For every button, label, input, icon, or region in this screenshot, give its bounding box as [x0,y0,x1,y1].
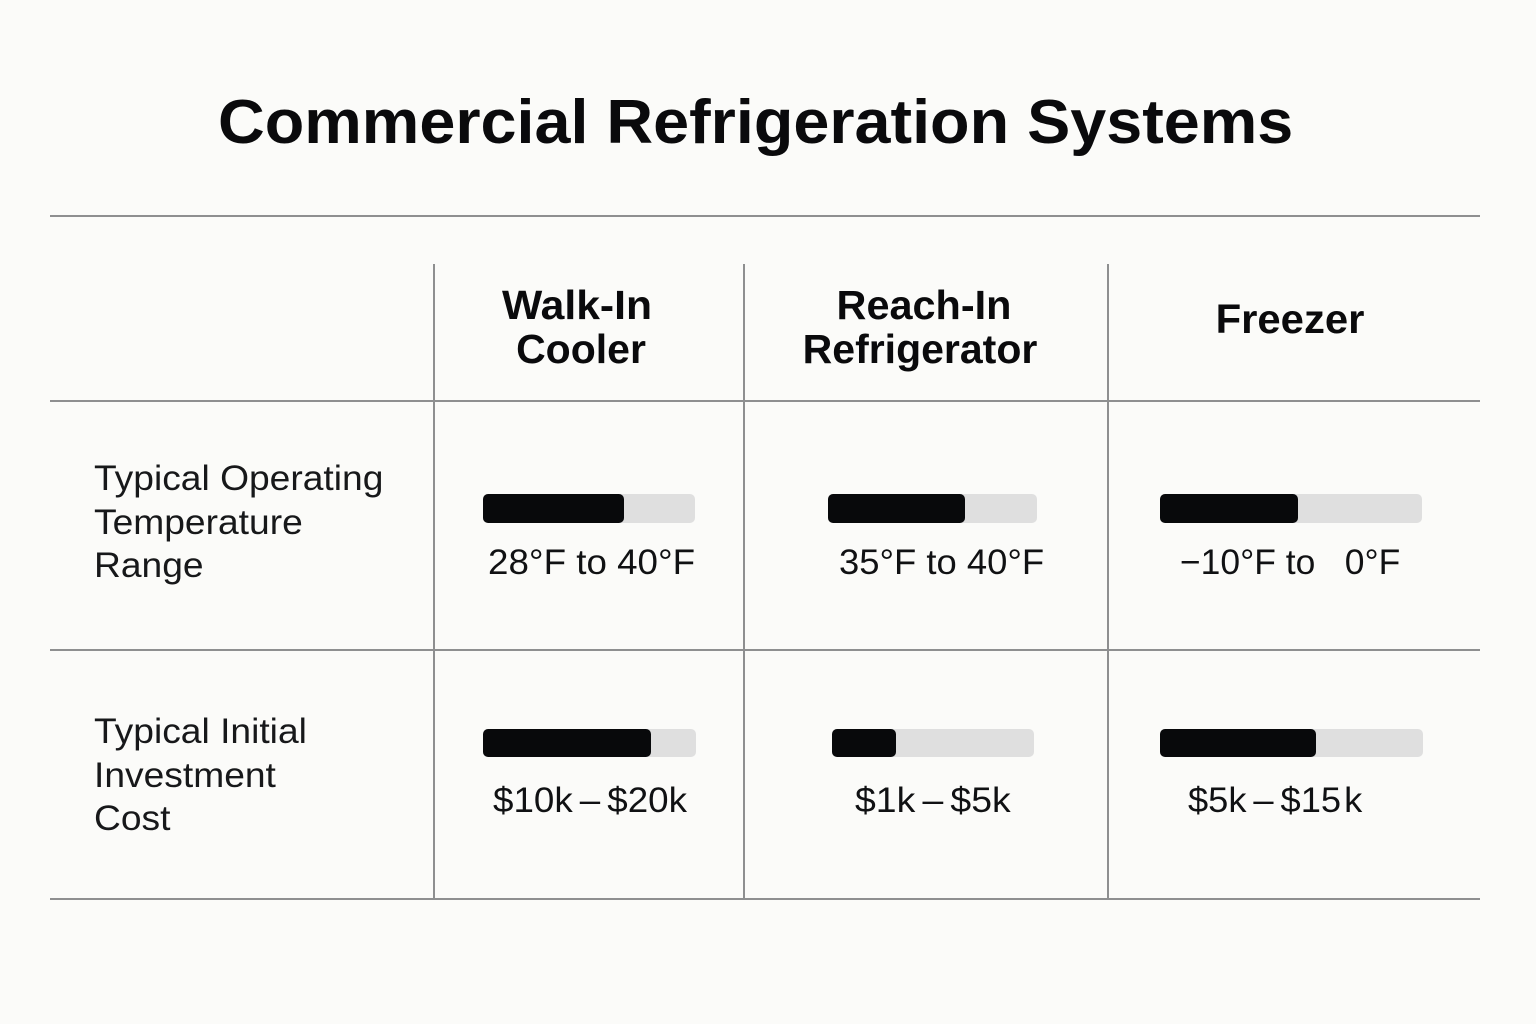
title: Commercial Refrigeration Systems [218,88,1293,157]
column heading: Walk-In Cooler [502,282,652,372]
bar: walk-in temperature [483,494,695,523]
bar: reach-in cost [832,729,1034,757]
bar: walk-in cost [483,729,696,757]
bar: freezer temperature [1160,494,1422,523]
row label: cost: Cost [94,799,170,838]
value: walk-in cost: $10k – $20k [493,781,687,820]
bar: reach-in temperature [828,494,1037,523]
column heading: Walk-In Cooler: Walk-In [502,282,652,328]
column heading: Reach-In Refrigerator: Refrigerator [803,326,1037,372]
column heading: Reach-In Refrigerator: Reach-In [837,282,1011,328]
row label: temperature [94,459,383,585]
row label: cost [94,712,307,838]
row label: cost: Investment [94,756,276,794]
value: freezer cost: $5k – $15k [1188,781,1362,820]
row label: cost: Typical Initial [94,712,307,751]
row label: temperature: Typical Operating [94,459,383,498]
row label: temperature: Temperature [94,502,303,542]
bar: freezer cost [1160,729,1423,757]
column heading: Reach-In Refrigerator [803,282,1037,372]
value: freezer temperature: −10°F to 0°F [1180,543,1400,582]
row label: temperature: Range [94,546,204,585]
column heading: Freezer: Freezer [1216,296,1364,342]
value: reach-in cost: $1k – $5k [855,781,1011,820]
value: reach-in temperature: 35°F to 40°F [839,543,1044,582]
value: walk-in temperature: 28°F to 40°F [488,543,695,582]
column heading: Walk-In Cooler: Cooler [516,326,646,372]
